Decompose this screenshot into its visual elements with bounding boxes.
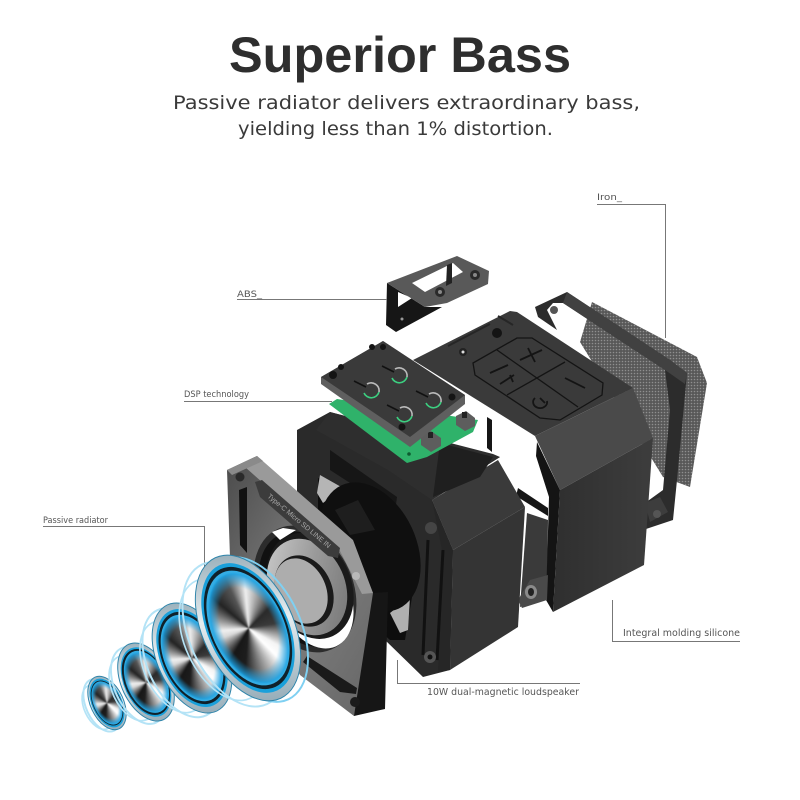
sound wave disc: smallest [81, 676, 127, 732]
label: 10W dual-magnetic loudspeaker: 10W dual-magnetic loudspeaker [427, 687, 580, 698]
button membrane plate [321, 341, 465, 447]
label: Iron: Iron_ [597, 193, 623, 203]
title: Superior Bass [229, 27, 571, 83]
label: Integral molding silicone: Integral molding silicone [623, 628, 740, 639]
sound wave disc: large [178, 554, 309, 708]
label: ABS: ABS_ [237, 290, 263, 300]
port cover with label: Type-C Micro SD LINE IN [266, 493, 331, 550]
sound wave disc: small [108, 642, 175, 725]
subtitle [173, 92, 640, 140]
radiator hole and disc [234, 509, 376, 669]
ABS bracket [386, 256, 489, 332]
subtitle: Passive radiator delivers extraordinary bass, [173, 92, 640, 114]
port cover with label [255, 480, 340, 558]
rear housing: middle panel [520, 513, 548, 607]
button contacts [354, 366, 441, 422]
DSP circuit board [321, 341, 478, 463]
loudspeaker flange and cone [300, 466, 440, 640]
subtitle: yielding less than 1% distortion. [238, 118, 553, 140]
front speaker housing [297, 412, 525, 677]
front plate with radiator [227, 456, 388, 716]
label: DSP technology: DSP technology [184, 390, 250, 400]
speaker back grille: iron mesh and frame [535, 292, 707, 530]
sound wave disc: medium [139, 602, 232, 718]
leader lines [43, 204, 740, 684]
label: Passive radiator: Passive radiator [43, 516, 108, 526]
button panel [473, 338, 603, 420]
tact switches [421, 411, 475, 452]
rear housing with button panel [413, 311, 653, 612]
